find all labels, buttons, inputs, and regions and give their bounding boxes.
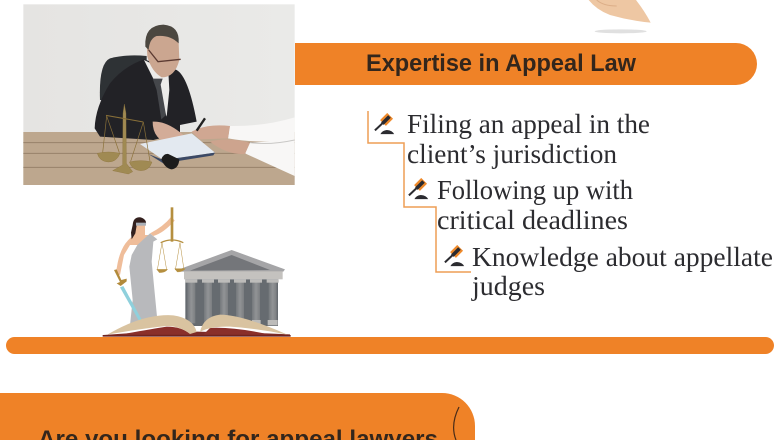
icon: open hand at top <box>589 0 651 33</box>
lady justice figure <box>114 217 175 325</box>
office chair <box>100 55 147 100</box>
scales of justice <box>157 207 185 273</box>
heading text: Expertise in Appeal Law <box>366 50 636 77</box>
document and clipboard <box>140 133 215 160</box>
list item: following up with deadlines <box>409 175 633 235</box>
desk <box>23 132 295 185</box>
stepped connector lines <box>368 111 471 272</box>
list item: filing an appeal: client’s jurisdiction <box>407 139 617 169</box>
lawyer hand <box>153 122 183 140</box>
list item: knowledge about judges: judges <box>471 271 545 301</box>
open book <box>103 315 291 337</box>
heading bar: Expertise in Appeal Law <box>295 43 757 85</box>
list item: knowledge about judges: Knowledge about appellate <box>472 242 773 272</box>
small gavel <box>161 154 179 169</box>
bottom panel: call to action <box>0 393 475 440</box>
client arms <box>228 117 295 142</box>
shirt and tie <box>144 60 169 117</box>
icon: gavel <box>375 113 394 134</box>
brass scales <box>97 104 152 174</box>
divider bar <box>6 337 774 354</box>
icon: gavel <box>445 245 464 266</box>
photo: lawyer signing document at desk <box>23 4 295 185</box>
hand shadow <box>595 29 647 33</box>
illustration: lady justice, courthouse and open book <box>103 207 291 337</box>
lawyer torso <box>95 59 197 140</box>
list item: filing an appeal: Filing an appeal in the <box>407 109 650 139</box>
list item: following up with deadlines: Following up with <box>437 175 633 205</box>
icon: gavel <box>409 178 428 199</box>
list item: following up with deadlines: critical deadlines <box>437 205 628 235</box>
list item: knowledge about judges <box>445 242 773 301</box>
courthouse <box>180 250 285 326</box>
list item: filing an appeal <box>375 109 650 169</box>
head <box>147 25 179 77</box>
